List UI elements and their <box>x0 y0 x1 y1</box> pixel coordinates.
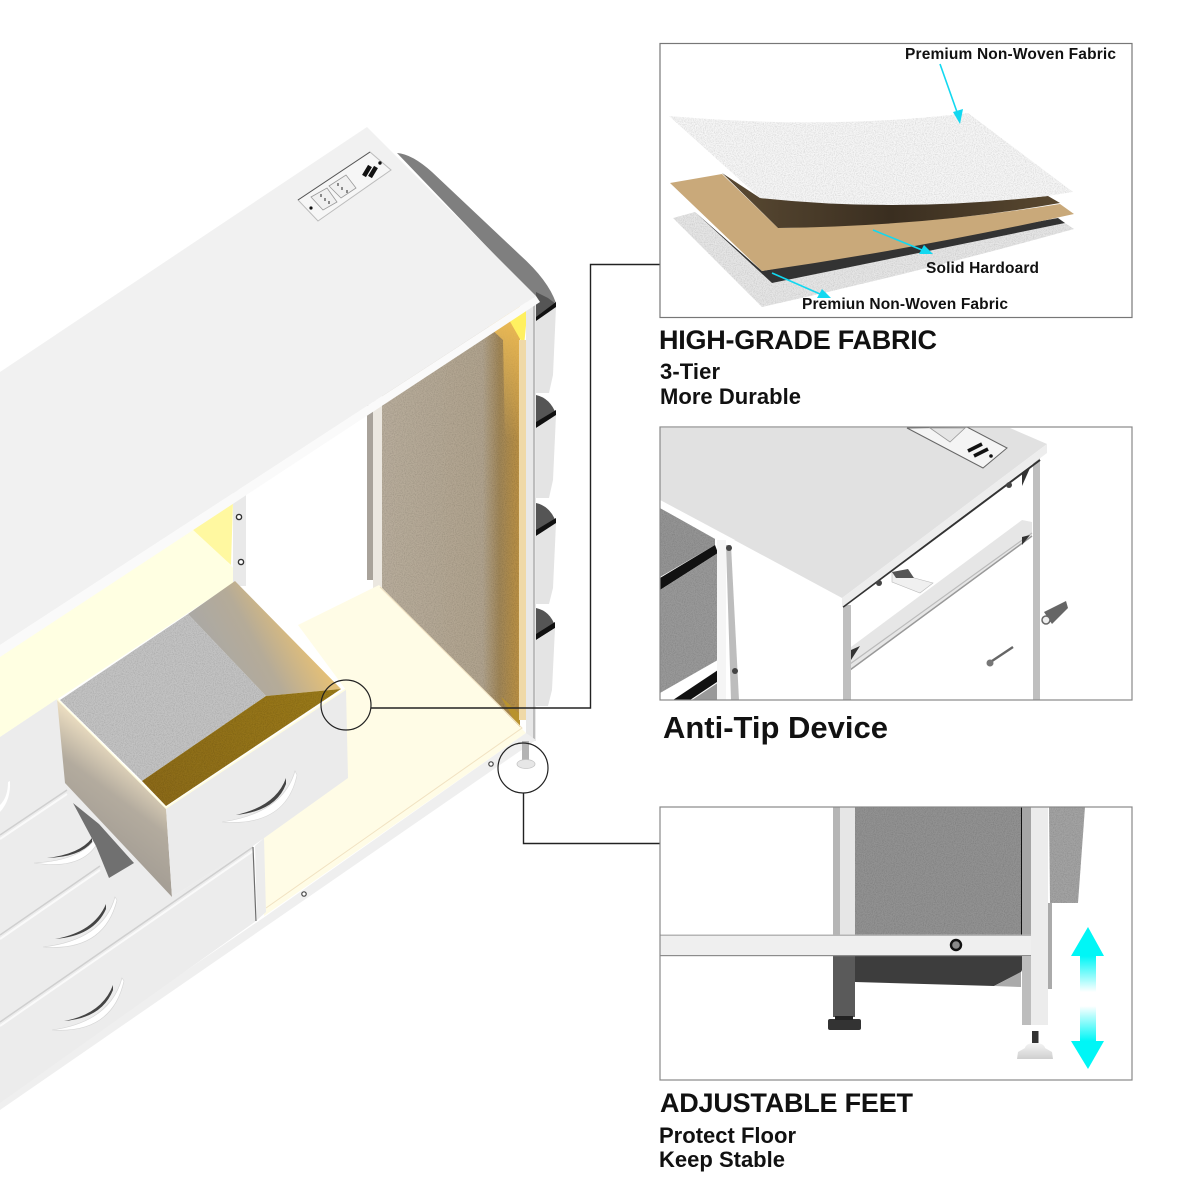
side fabric drawers <box>536 292 556 706</box>
top rail <box>843 460 1040 607</box>
illustration: dresser with open drawer <box>0 127 556 1110</box>
drawer floor <box>142 689 341 806</box>
floor seam <box>266 587 522 908</box>
wall anchor <box>1042 601 1068 624</box>
heading: adjustable feet: ADJUSTABLE FEET <box>660 1088 914 1118</box>
yellow lit left compartment <box>0 490 246 737</box>
far upright post <box>367 400 382 588</box>
text: feet details <box>659 1123 796 1172</box>
label: hardboard: Solid Hardoard <box>926 260 1039 277</box>
base rail <box>0 733 536 1110</box>
tabletop <box>0 127 540 657</box>
rear leg <box>1033 458 1040 701</box>
adjustable foot on dresser <box>517 741 535 768</box>
panel: fabric layers <box>660 44 1132 318</box>
fabric panel <box>855 807 1021 935</box>
dark far leg <box>828 956 861 1030</box>
left post <box>833 807 855 935</box>
fabric side pocket <box>1049 807 1085 903</box>
drawer stack fronts <box>0 699 266 1103</box>
tabletop <box>660 428 1047 598</box>
front leg <box>843 605 851 701</box>
white strip under tabletop <box>660 504 734 540</box>
dark layer <box>695 212 1065 283</box>
text: feet details: Protect Floor <box>659 1123 796 1148</box>
arrow: bottom fabric <box>772 273 831 298</box>
horizontal rail <box>660 934 1032 956</box>
label: bottom fabric: Premiun Non-Woven Fabric <box>802 296 1008 313</box>
text: fabric details <box>660 359 801 409</box>
grey rear drawer edge <box>397 153 556 303</box>
crossbar <box>850 520 1032 670</box>
screw <box>986 647 1013 666</box>
label: top fabric: Premium Non-Woven Fabric <box>905 46 1116 63</box>
text: fabric details: More Durable <box>660 384 801 409</box>
top fabric layer <box>669 113 1073 205</box>
middle post <box>717 540 739 700</box>
drawer rim highlight <box>57 689 346 808</box>
heading: fabric: HIGH-GRADE FABRIC <box>659 325 937 355</box>
lit bottom shelf <box>262 585 526 916</box>
shadow under open drawer <box>73 803 134 878</box>
text: feet details: Keep Stable <box>659 1147 785 1172</box>
rear bar <box>892 572 933 593</box>
bottom fabric layer <box>673 212 1074 307</box>
drawer front panel <box>166 689 348 897</box>
drawer left side <box>57 699 172 897</box>
underside shadow <box>855 955 1030 986</box>
fabric drawers <box>660 508 717 700</box>
arrow: hardboard <box>873 230 933 254</box>
panel: anti-tip device <box>660 427 1132 701</box>
drawer handle <box>222 771 297 822</box>
arrow: top fabric <box>940 64 963 124</box>
power outlet strip <box>298 152 391 221</box>
text: fabric details: 3-Tier <box>660 359 720 384</box>
lit fabric back panel <box>382 305 528 730</box>
callout connector: fabric <box>321 264 660 730</box>
right leg <box>1022 807 1048 1025</box>
adjustable foot <box>1017 1031 1053 1059</box>
dark underside of board <box>722 173 1060 228</box>
drawer handles on fronts <box>0 781 124 1030</box>
right corner post <box>519 296 536 741</box>
hardboard layer <box>670 174 1074 271</box>
outlet strip <box>907 427 1007 468</box>
drawer back wall <box>60 614 266 781</box>
callout connector: feet <box>498 743 660 844</box>
open drawer <box>57 581 348 897</box>
drawer right wall <box>188 581 341 696</box>
height arrow <box>1071 927 1104 1069</box>
shelf screws <box>302 762 493 896</box>
heading: anti-tip: Anti-Tip Device <box>663 710 888 745</box>
panel: adjustable feet <box>660 807 1132 1080</box>
